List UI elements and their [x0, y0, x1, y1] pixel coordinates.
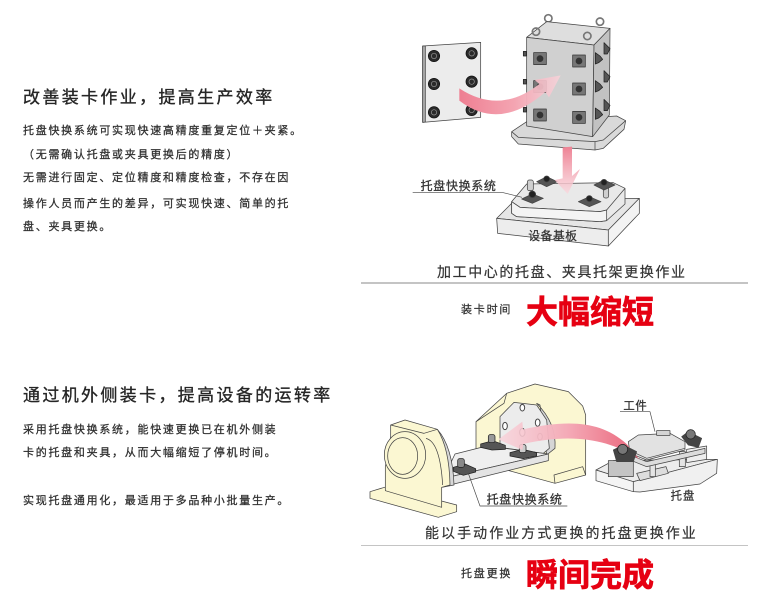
body text: lower description: 采用托盘快换系统，能快速更换已在机外侧装 [23, 424, 277, 436]
label: pallet quick change system: 托盘快换系统 [421, 178, 497, 193]
label: loading time: 装卡时间 [461, 304, 512, 316]
heading: improve loading: 改善装卡作业，提高生产效率 [23, 88, 275, 107]
upper base plate [512, 116, 626, 150]
lower pallet plate [512, 183, 625, 222]
pallet with workpiece [596, 430, 717, 492]
heading: outside loading: 通过机外侧装卡，提高设备的运转率 [23, 386, 333, 405]
body text: upper description: 盘、夹具更换。 [23, 221, 112, 233]
rotary face plate [500, 402, 555, 455]
body text: upper description: （无需确认托盘或夹具更换后的精度） [23, 149, 239, 161]
body text: upper description: 无需进行固定、定位精度和精度检查，不存在因 [23, 172, 290, 184]
result: greatly shortened: 大幅缩短 [526, 294, 654, 330]
body text: upper description [23, 124, 303, 233]
removable plate [423, 42, 481, 122]
body text: upper description: 托盘快换系统可实现快速高精度重复定位＋夹紧。 [23, 125, 303, 137]
label: pallet quick change system [413, 178, 522, 197]
clamps and pins [522, 176, 615, 207]
illustration: manual pallet change [370, 384, 717, 517]
side face clamps [523, 43, 610, 119]
panel: upper text block [23, 88, 303, 233]
tombstone block [527, 22, 610, 137]
label: workpiece [620, 398, 655, 432]
rear trunnion [476, 384, 586, 483]
body text: lower description: 卡的托盘和夹具，从而大幅缩短了停机时间。 [23, 447, 277, 459]
panel: lower text block [23, 386, 333, 507]
result: instantly done: 瞬间完成 [526, 557, 654, 593]
label: pallet quick change system [468, 473, 567, 506]
body text: lower description [23, 423, 290, 507]
body text: lower description: 实现托盘通用化，最适用于多品种小批量生产。 [23, 495, 290, 507]
caption: manual pallet change: 能以手动作业方式更换的托盘更换作业 [425, 525, 698, 541]
label: pallet quick change system: 托盘快换系统 [487, 491, 563, 506]
arrow: down to base [555, 147, 580, 194]
front face clamps [534, 53, 585, 123]
pallet beam [443, 446, 548, 487]
label: pallet change: 托盘更换 [461, 568, 512, 580]
label: device base plate: 设备基板 [528, 229, 578, 243]
left pallet clamp [608, 444, 637, 477]
body text: upper description: 操作人员而产生的差异，可实现快速、简单的托 [23, 198, 290, 210]
illustration: machining center pallet [413, 15, 639, 246]
arrow: plate to block [459, 75, 561, 114]
beam clamps [453, 435, 537, 475]
label: pallet: 托盘 [671, 488, 695, 502]
front trunnion [370, 420, 457, 517]
front eye bolts [532, 28, 591, 40]
caption: machining center change: 加工中心的托盘、夹具托架更换作业 [437, 264, 687, 280]
arrow: pallet to machine [498, 422, 639, 459]
eye bolts [545, 15, 604, 25]
label: workpiece: 工件 [623, 398, 647, 412]
device base [497, 198, 639, 246]
